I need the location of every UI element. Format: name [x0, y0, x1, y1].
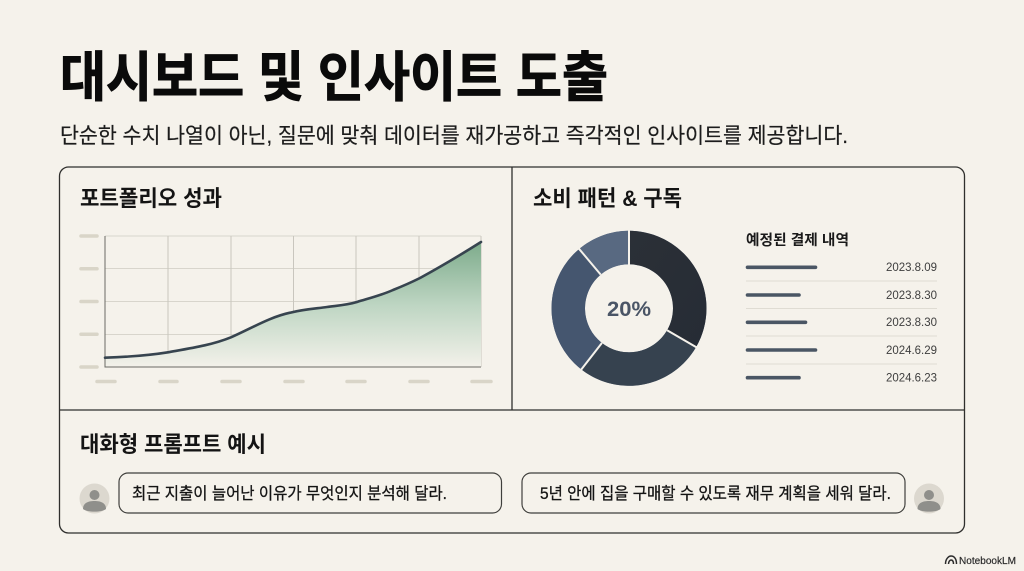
row 3: 2023.8.30: [886, 317, 937, 329]
dashboard frame: [60, 167, 964, 533]
heading: prompt examples: 대화형 프롬프트 예시: [80, 432, 266, 457]
scheduled payments list: [746, 232, 937, 384]
icon: user avatar right: [914, 484, 944, 514]
prompt bubble left: [119, 473, 502, 513]
panel: conversational prompt examples: [80, 432, 944, 514]
prompt text right: 5년 안에 집을 구매할 수 있도록 재무 계획을 세워 달라.: [540, 484, 891, 503]
line chart: [81, 236, 491, 382]
watermark text: NotebookLM: [959, 555, 1016, 567]
list heading: 예정된 결제 내역: [746, 232, 849, 249]
y axis tick placeholders: [81, 236, 97, 367]
row 1: 2023.8.09: [886, 262, 937, 274]
x axis tick placeholders: [97, 380, 491, 383]
title: 대시보드 및 인사이트 도출: [60, 48, 608, 108]
row 2: 2023.8.30: [886, 290, 937, 302]
axes: [105, 236, 481, 367]
prompt bubble right: [522, 473, 905, 513]
subtitle: 단순한 수치 나열이 아닌, 질문에 맞춰 데이터를 재가공하고 즉각적인 인사이트를 제공합니다.: [60, 124, 848, 148]
data line: [105, 242, 481, 358]
heading: spending patterns: 소비 패턴 & 구독: [533, 186, 682, 211]
NotebookLM watermark: [946, 555, 1016, 567]
row 5: 2024.6.23: [886, 372, 937, 384]
heading: portfolio performance: 포트폴리오 성과: [80, 186, 222, 211]
icon: user avatar left: [80, 484, 110, 514]
prompt text left: 최근 지출이 늘어난 이유가 무엇인지 분석해 달라.: [132, 484, 447, 503]
row 4: 2024.6.29: [886, 345, 937, 357]
area fill: [105, 242, 481, 367]
donut chart: [552, 230, 706, 386]
icon: NotebookLM logo: [946, 556, 956, 564]
prompt right: [522, 473, 944, 514]
prompt left: [80, 473, 502, 514]
panel: portfolio performance: [80, 186, 491, 382]
panel: spending patterns and subscriptions: [533, 186, 937, 386]
donut center value: 20%: [607, 298, 651, 321]
